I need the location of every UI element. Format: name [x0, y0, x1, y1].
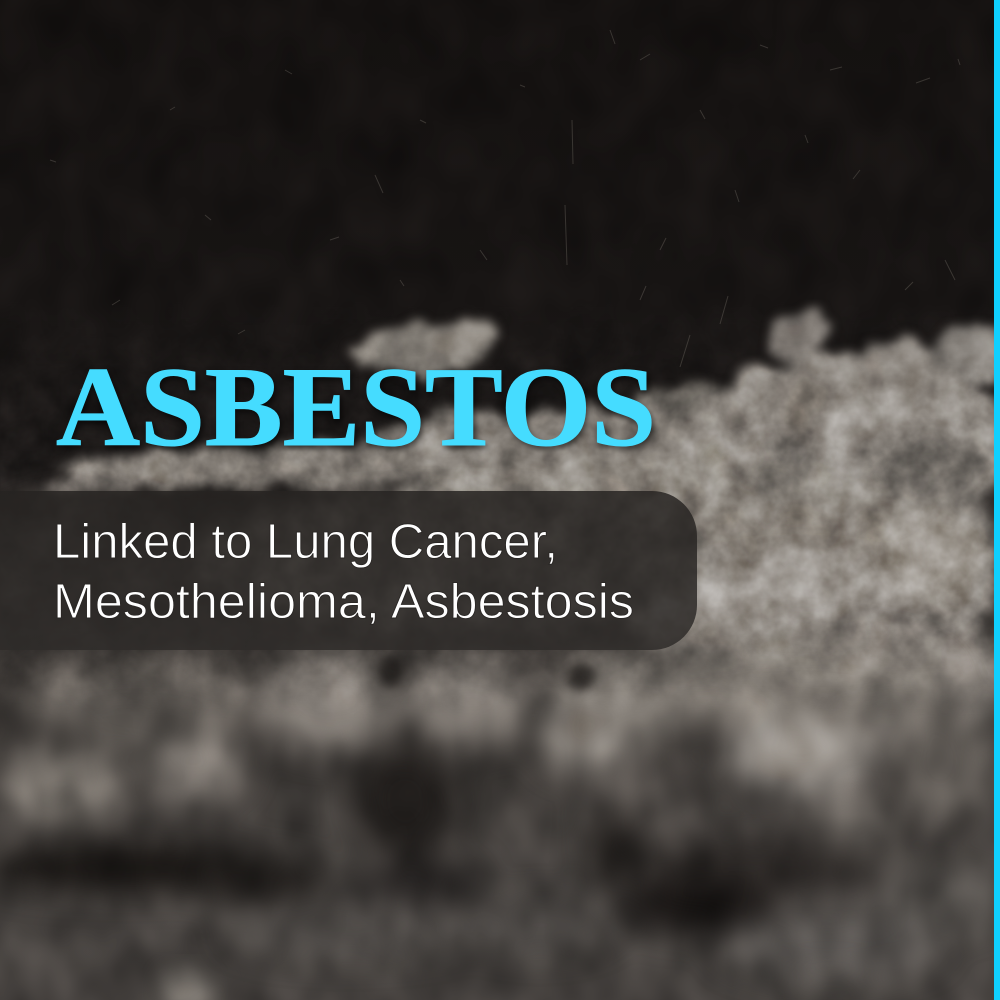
dust specks on dark	[50, 30, 960, 390]
subtitle text	[53, 515, 634, 629]
subtitle text: Mesothelioma, Asbestosis	[53, 575, 634, 629]
right edge accent bar	[994, 0, 1000, 1000]
mid cloud	[0, 440, 1000, 750]
subtitle panel	[0, 491, 697, 650]
lower blurred puffs	[0, 635, 1000, 975]
upper cloud mass	[40, 313, 1000, 580]
subtitle text: Linked to Lung Cancer,	[53, 515, 558, 569]
dark specks in cloud	[379, 656, 595, 691]
fine fibre texture	[10, 332, 994, 694]
title: ASBESTOS	[56, 345, 656, 470]
floor tuft	[161, 970, 209, 1000]
